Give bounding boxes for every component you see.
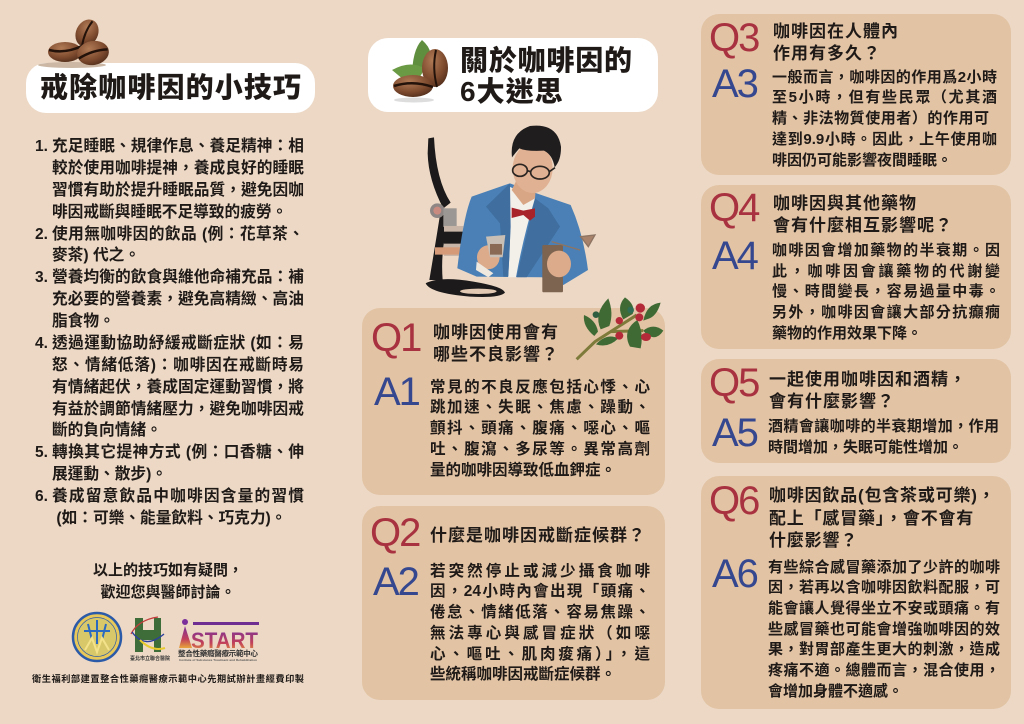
A1 answer: 跳加速、失眠、焦慮、躁動、 <box>430 399 650 416</box>
lapels <box>486 183 511 277</box>
tips list: 轉換其它提神方式 (例：口香糖、伸 <box>52 444 304 461</box>
title: tips: 戒除咖啡因的小技巧 <box>40 72 301 103</box>
A2 label: A2 <box>373 560 418 604</box>
panel: Q5 <box>701 359 1011 463</box>
Q3 question <box>773 22 899 62</box>
Q1 question: 咖啡因使用會有 <box>433 323 559 342</box>
Q3 label: Q3 <box>709 16 758 60</box>
A3 label: A3 <box>712 62 757 106</box>
Q2 question: 什麼是咖啡因戒斷症候群？ <box>430 526 646 545</box>
A2 answer: 若突然停止或減少攝食咖啡 <box>430 562 650 580</box>
tips list <box>52 137 304 527</box>
logo: ministry emblem <box>73 613 121 661</box>
panel: Q4 <box>701 185 1011 349</box>
panel: Q6 <box>701 476 1011 709</box>
A1 answer: 顫抖、頭痛、腹痛、噁心、嘔 <box>430 420 650 437</box>
tips list: 使用無咖啡因的飲品 (例：花草茶、 <box>52 226 304 242</box>
Q3 question: 作用有多久？ <box>773 44 881 62</box>
tips list: 充足睡眠、規律作息、養足精神：相 <box>52 138 304 155</box>
A4 answer: 慢、時間變長，容易過量中毒。 <box>772 283 1000 300</box>
tips list: 有益於調節情緒壓力，避免咖啡因戒 <box>52 400 304 418</box>
A3 answer: 精、非法物質使用者）的作用可 <box>772 110 989 127</box>
icon: coffee branch with berries <box>577 297 663 359</box>
tips list: 展運動、散步)。 <box>52 466 167 483</box>
closing note: 以上的技巧如有疑問， <box>93 562 243 579</box>
A5 label: A5 <box>712 411 757 455</box>
A4 answer: 咖啡因會增加藥物的半衰期。因 <box>772 242 1000 259</box>
funding credit: 衛生福利部建置整合性藥癮醫療示範中心先期試辦計畫經費印製 <box>32 674 304 684</box>
coffee press <box>426 137 505 297</box>
grinder <box>542 245 563 292</box>
A2 answer <box>430 562 650 683</box>
tips list numbers <box>35 138 48 505</box>
logo: iSTART: Institute of Substance Treatment and Rehabilitation <box>179 658 257 662</box>
A6 answer: 會增加身體不適感。 <box>768 683 903 700</box>
icon: three coffee beans <box>38 16 111 68</box>
A5 answer: 酒精會讓咖啡的半衰期增加，作用 <box>768 418 999 435</box>
A1 answer: 常見的不良反應包括心悸、心 <box>430 378 650 396</box>
A4 label: A4 <box>712 234 757 278</box>
logo: iSTART <box>178 619 259 662</box>
Q5 question: 會有什麼影響？ <box>769 392 895 410</box>
Q1 question: 哪些不良影響？ <box>433 344 559 364</box>
A1 label: A1 <box>374 370 419 414</box>
tips list numbers: 5. <box>35 444 48 461</box>
title: myths: 關於咖啡因的 <box>460 45 632 76</box>
A1 answer: 吐、腹瀉、多尿等。異常高劑 <box>430 441 650 458</box>
A4 answer: 此，咖啡因會讓藥物的代謝變 <box>772 263 1000 280</box>
A2 answer: 些統稱咖啡因戒斷症候群。 <box>430 666 616 683</box>
Q6 label: Q6 <box>709 479 758 523</box>
A2 answer: 無法專心與感冒症狀（如噁 <box>430 625 650 642</box>
A3 answer: 啡因仍可能影響夜間睡眠。 <box>772 152 952 169</box>
logo: Taipei City Hospital H: 臺北市立聯合醫院 <box>130 655 170 662</box>
A2 answer: 因，24小時內會出現「頭痛、 <box>430 583 650 600</box>
panel: Q2 <box>362 506 665 700</box>
tips list: 養成留意飲品中咖啡因含量的習慣 <box>52 488 304 505</box>
Q6 question: 什麼影響？ <box>769 531 858 550</box>
bow tie <box>512 208 535 221</box>
tips list: 斷的負向情緒。 <box>52 422 162 439</box>
tips list numbers: 1. <box>35 138 48 155</box>
A3 answer <box>772 68 997 169</box>
A6 answer: 些感冒藥也可能會增強咖啡因的效 <box>768 621 1000 638</box>
icon: coffee beans with leaves <box>392 40 448 102</box>
Q4 question: 會有什麼相互影響呢？ <box>773 216 953 234</box>
logo: iSTART: START <box>191 628 259 653</box>
title: myths <box>460 45 632 107</box>
A4 answer: 藥物的作用效果下降。 <box>772 325 922 342</box>
Q1 label: Q1 <box>371 316 420 360</box>
panel: Q3 <box>701 14 1011 175</box>
tips list numbers: 2. <box>35 226 48 242</box>
Q4 label: Q4 <box>709 186 758 230</box>
A3 answer: 達到9.9小時。因此，上午使用咖 <box>772 131 997 148</box>
tips list: (如：可樂、能量飲料、巧克力)。 <box>56 510 286 527</box>
A6 answer: 有些綜合感冒藥添加了少許的咖啡 <box>768 558 1000 576</box>
tips list: 透過運動協助紓緩戒斷症狀 (如：易 <box>52 335 304 352</box>
tips list numbers: 3. <box>35 269 48 286</box>
tips list: 怒、情緒低落)：咖啡因在戒斷時易 <box>52 357 304 374</box>
face <box>513 144 553 193</box>
Q2 label: Q2 <box>370 511 419 555</box>
tips list: 脂食物。 <box>52 313 115 330</box>
title: myths: 6大迷思 <box>460 76 564 107</box>
tips list: 習慣有助於提升睡眠品質，避免因咖 <box>52 182 304 199</box>
A2 answer: 倦怠、情緒低落、容易焦躁、 <box>430 604 650 621</box>
Q4 question <box>773 194 953 234</box>
closing note <box>93 562 243 601</box>
A4 answer <box>772 242 1000 342</box>
Q6 question <box>769 486 996 550</box>
title panel: six myths <box>368 38 658 112</box>
A5 answer <box>768 418 999 456</box>
illustration: man with coffee equipment <box>426 126 595 297</box>
A6 answer: 因，若再以含咖啡因飲料配服，可 <box>768 579 1000 596</box>
title panel: quitting tips <box>26 63 315 113</box>
tips list: 啡因戒斷與睡眠不足導致的疲勞。 <box>52 204 287 221</box>
hair <box>512 126 561 167</box>
Q5 question: 一起使用咖啡因和酒精， <box>769 370 967 389</box>
Q1 question <box>433 323 559 364</box>
A3 answer: 至5小時，但有些民眾（尤其酒 <box>772 89 997 106</box>
logo: Taipei City Hospital H <box>130 617 170 662</box>
tips list: 營養均衡的飲食與維他命補充品：補 <box>52 269 304 286</box>
neck <box>512 180 537 205</box>
A1 answer <box>430 378 650 479</box>
shirt <box>508 187 535 277</box>
tips list: 充必要的營養素，避免高精緻、高油 <box>52 291 304 308</box>
Q6 question: 咖啡因飲品(包含茶或可樂)， <box>769 486 996 505</box>
A6 answer: 能會讓人覺得坐立不安或頭痛。有 <box>768 600 1000 617</box>
A6 answer <box>768 558 1000 700</box>
hands and glass <box>477 245 500 269</box>
closing note: 歡迎您與醫師討論。 <box>100 584 236 601</box>
logo: iSTART: 整合性藥癮醫療示範中心 <box>178 648 258 658</box>
tips list: 麥茶) 代之。 <box>52 247 140 264</box>
tips list: 有情緒起伏，養成固定運動習慣，將 <box>52 379 304 396</box>
glasses <box>513 164 555 179</box>
Q4 question: 咖啡因與其他藥物 <box>773 194 917 213</box>
A2 answer: 心、嘔吐、肌肉痠痛）」，這 <box>430 646 650 663</box>
panel: Q1 <box>362 308 665 495</box>
jacket <box>457 183 588 285</box>
A5 answer: 時間增加，失眠可能性增加。 <box>768 439 963 456</box>
A6 label: A6 <box>712 552 757 596</box>
A4 answer: 另外，咖啡因會讓大部分抗癲癇 <box>772 304 1000 321</box>
A6 answer: 疼痛不適。總體而言，混合使用， <box>768 662 1000 679</box>
A3 answer: 一般而言，咖啡因的作用爲2小時 <box>772 68 997 86</box>
tips list numbers: 6. <box>35 488 48 505</box>
A6 answer: 果，對胃部產生更大的刺激，造成 <box>768 641 1000 658</box>
tips list: 較於使用咖啡提神，養成良好的睡眠 <box>52 160 304 177</box>
Q5 label: Q5 <box>709 361 758 405</box>
tips list numbers: 4. <box>35 335 48 352</box>
Q6 question: 配上「感冒藥」，會不會有 <box>769 508 974 528</box>
Q3 question: 咖啡因在人體內 <box>773 22 899 41</box>
A1 answer: 量的咖啡因導致低血鉀症。 <box>430 462 616 479</box>
Q5 question <box>769 370 967 410</box>
